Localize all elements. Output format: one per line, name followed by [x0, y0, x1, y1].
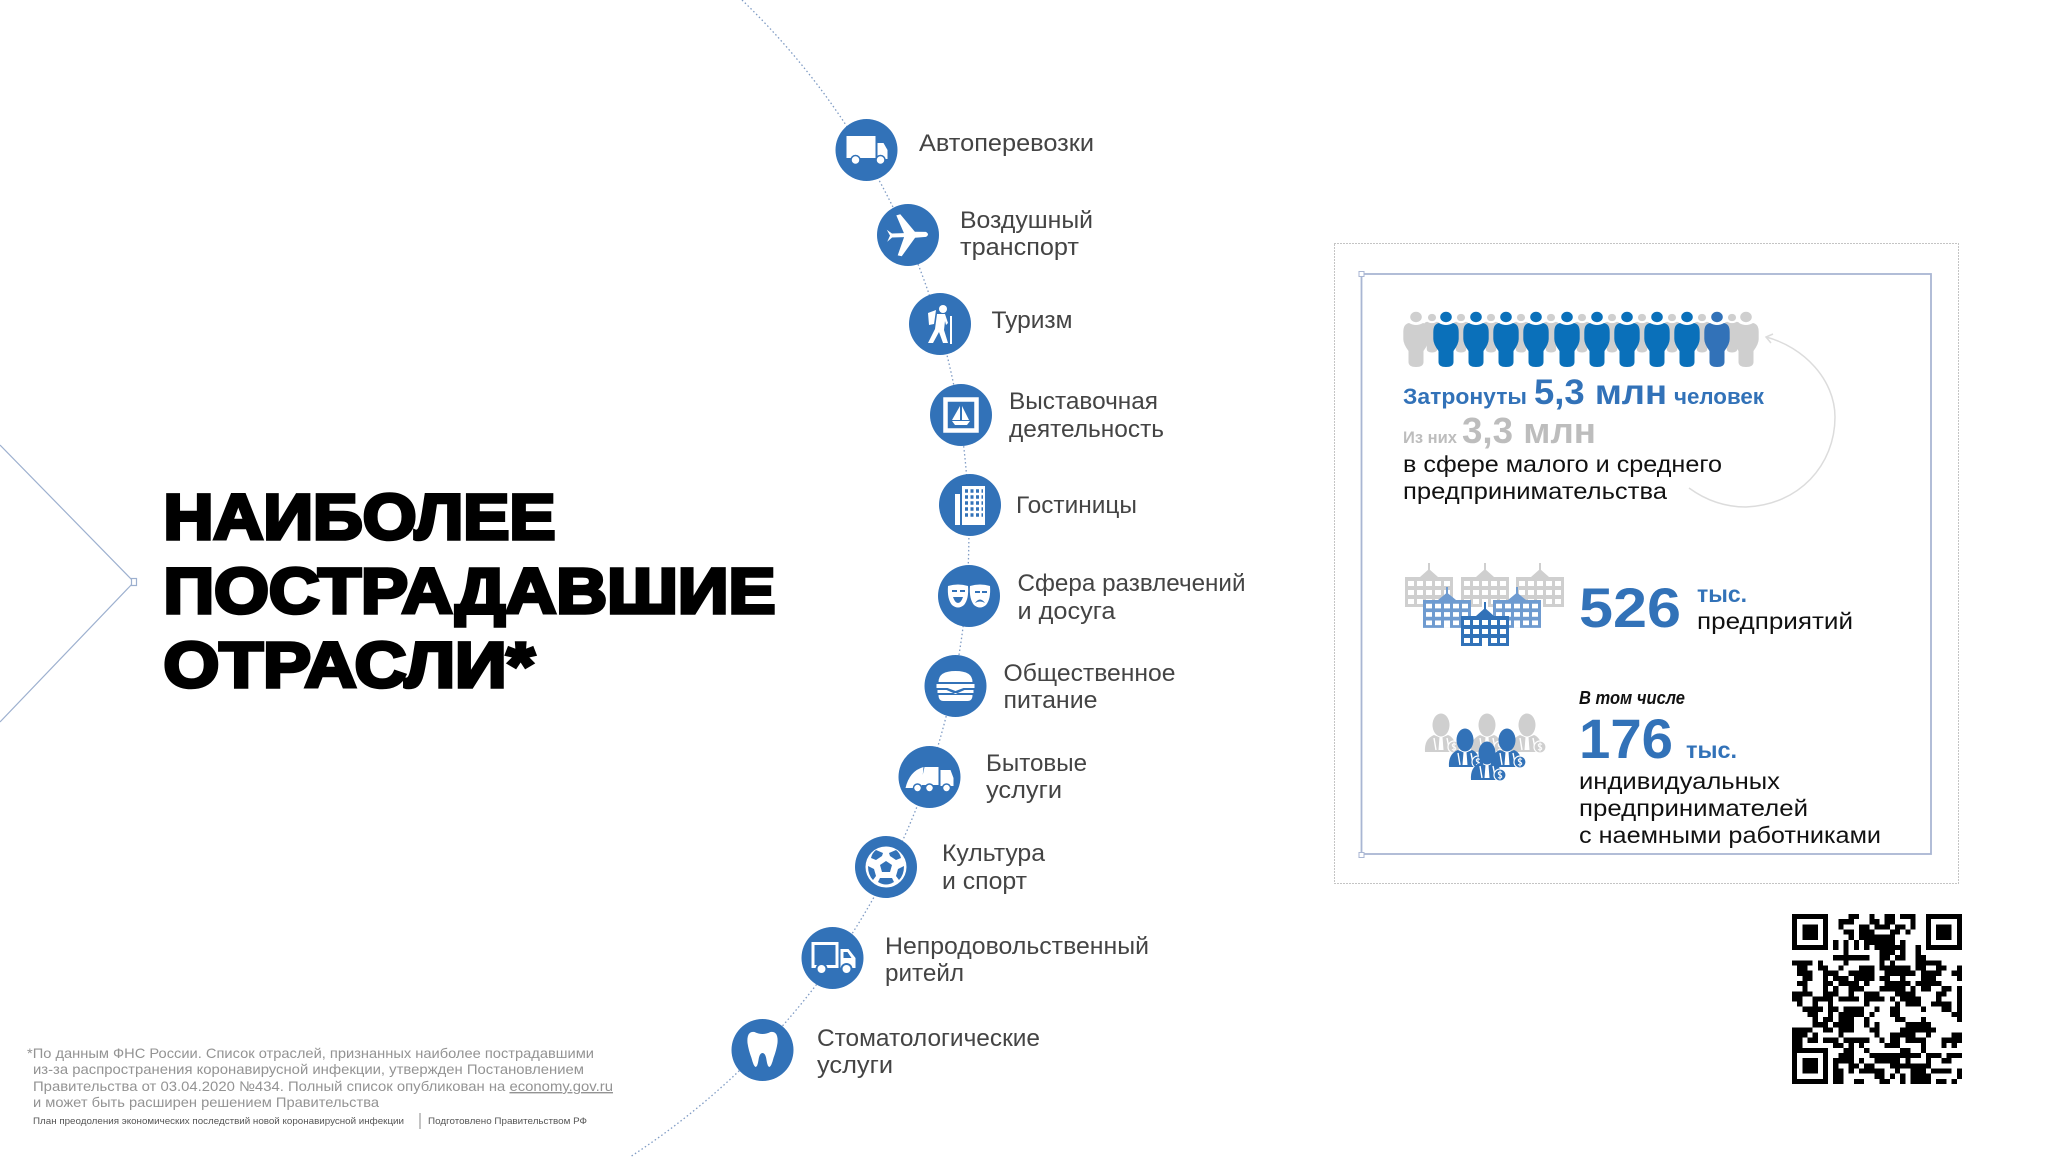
stat: enterprises: 526	[1579, 576, 1681, 639]
icon: entrepreneurs	[1425, 714, 1546, 781]
item: household services	[898, 746, 1087, 808]
stat: individual entrepreneurs: В том числе	[1579, 688, 1685, 708]
stat: individual entrepreneurs: 176	[1579, 707, 1673, 770]
title: НАИБОЛЕЕ	[164, 481, 556, 553]
item: road freight: Автоперевозки	[919, 130, 1094, 157]
right panel dotted frame	[1334, 244, 1958, 884]
stat: affected people: в сфере малого и среднего	[1403, 451, 1722, 477]
item: entertainment	[938, 565, 1246, 627]
item: tourism: Туризм	[992, 307, 1072, 334]
footnote: *По данным ФНС России. Список отраслей, признанных наиболее пострадавшими	[27, 1045, 594, 1061]
stat: enterprises: предприятий	[1697, 608, 1853, 634]
stat: affected people: предпринимательства	[1403, 478, 1668, 504]
dotted arc	[630, 0, 969, 1157]
item: exhibitions: деятельность	[1009, 416, 1164, 443]
footer source line	[33, 1113, 587, 1129]
item: non-food retail	[802, 927, 1149, 989]
stat: individual entrepreneurs: индивидуальных	[1579, 768, 1780, 794]
footer source line: Подготовлено Правительством РФ	[428, 1116, 587, 1127]
curved arrow	[1689, 334, 1835, 507]
industry list	[732, 119, 1246, 1081]
item: culture and sport	[855, 836, 1046, 898]
item: hotels	[939, 474, 1137, 536]
item: culture and sport: Культура	[942, 840, 1046, 867]
stat: affected people: Из них	[1403, 428, 1458, 447]
icon: buildings	[1405, 563, 1564, 646]
stat: affected people: человек	[1674, 384, 1765, 409]
item: household services: услуги	[986, 777, 1062, 804]
item: dental services: услуги	[817, 1052, 893, 1079]
item: culture and sport: и спорт	[942, 868, 1027, 895]
title: ПОСТРАДАВШИЕ	[164, 555, 776, 627]
stat: affected people: 5,3 млн	[1534, 373, 1667, 412]
item: air transport: транспорт	[960, 234, 1079, 261]
stat: enterprises: тыс.	[1697, 581, 1747, 607]
stat: affected people	[1403, 373, 1765, 504]
chevron line with node	[0, 445, 136, 722]
footnote: из-за распространения коронавирусной инфекции, утвержден Постановлением	[33, 1061, 584, 1077]
item: dental services: Стоматологические	[817, 1025, 1040, 1052]
stat: individual entrepreneurs: тыс.	[1686, 737, 1737, 763]
footnote: и может быть расширен решением Правительства	[33, 1094, 379, 1110]
item: air transport: Воздушный	[960, 207, 1093, 234]
QR code	[1792, 917, 1962, 1081]
item: dental services	[732, 1019, 1040, 1081]
item: entertainment: Сфера развлечений	[1018, 570, 1246, 597]
people row	[1403, 312, 1759, 367]
item: air transport	[877, 204, 1093, 266]
item: catering	[924, 655, 1176, 717]
footnote: Правительства от 03.04.2020 №434. Полный список опубликован на economy.gov.ru	[33, 1078, 613, 1094]
item: tourism	[909, 293, 1072, 355]
stat: individual entrepreneurs	[1579, 688, 1881, 848]
footer source line: План преодоления экономических последствий новой коронавирусной инфекции	[33, 1116, 404, 1127]
item: hotels: Гостиницы	[1016, 492, 1137, 519]
item: entertainment: и досуга	[1018, 598, 1116, 625]
stat: affected people: Затронуты	[1403, 384, 1527, 409]
item: household services: Бытовые	[986, 750, 1087, 777]
stat: individual entrepreneurs: предпринимателей	[1579, 795, 1808, 821]
item: catering: питание	[1004, 687, 1098, 714]
stat: affected people: 3,3 млн	[1462, 410, 1596, 451]
item: non-food retail: ритейл	[885, 960, 964, 987]
item: exhibitions	[930, 384, 1164, 446]
footnote	[27, 1045, 613, 1110]
title: ОТРАСЛИ*	[164, 629, 535, 701]
right panel solid frame	[1359, 272, 1931, 858]
item: road freight	[836, 119, 1094, 181]
item: non-food retail: Непродовольственный	[885, 933, 1149, 960]
item: catering: Общественное	[1004, 660, 1176, 687]
item: exhibitions: Выставочная	[1009, 388, 1158, 415]
stat: enterprises	[1579, 576, 1853, 639]
stat: individual entrepreneurs: с наемными работниками	[1579, 822, 1881, 848]
title	[164, 481, 776, 701]
